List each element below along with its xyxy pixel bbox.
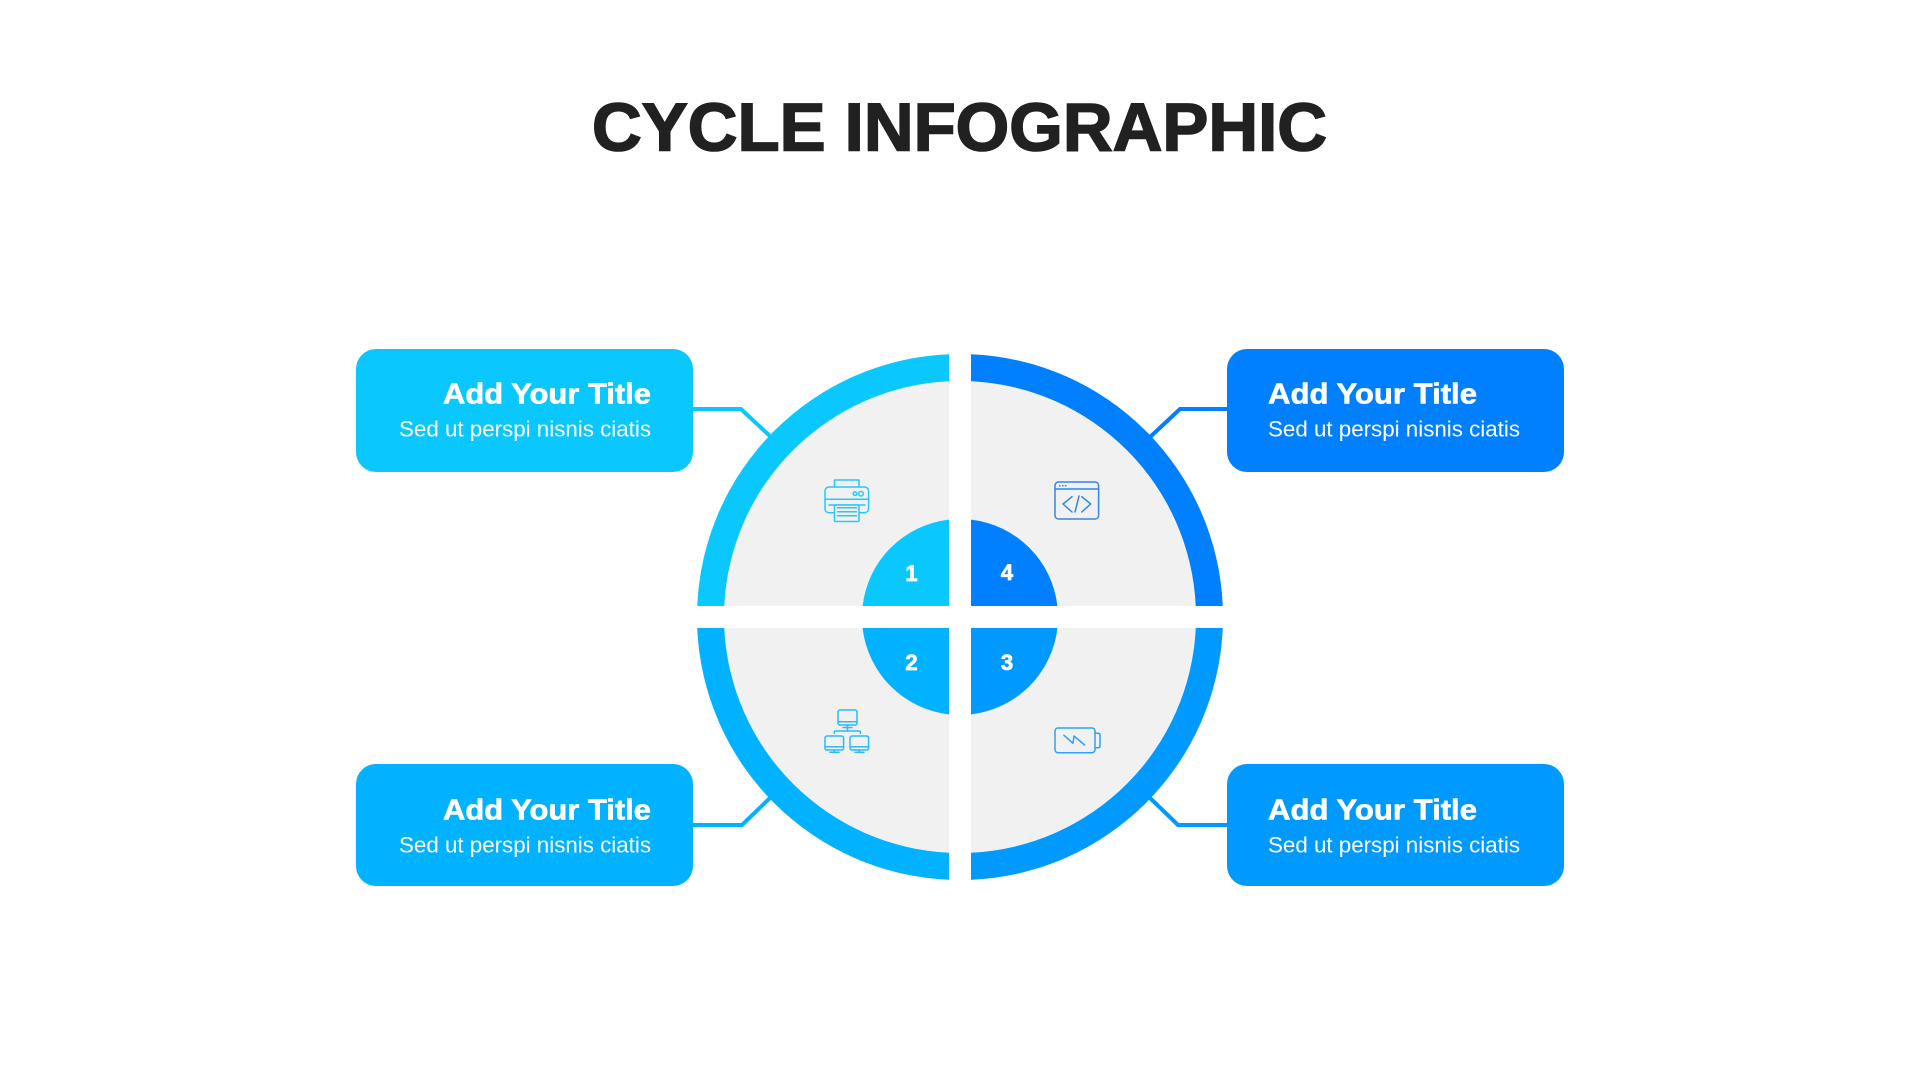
icon: code window [1055, 482, 1099, 519]
number 3: 3 [1001, 650, 1013, 675]
panel: segment 3 [971, 628, 1223, 880]
icon: battery charging [1055, 728, 1100, 753]
heading: box 3: Add Your Title [1268, 794, 1477, 826]
panel: segment 4 [971, 354, 1223, 606]
panel: callout box 4 [1227, 349, 1564, 472]
connector: box 1 to segment 1 [693, 409, 772, 438]
heading: box 2: Add Your Title [443, 794, 651, 826]
heading: box 1: Add Your Title [443, 378, 651, 410]
panel: callout box 3 [1227, 764, 1564, 886]
connector: box 2 to segment 2 [693, 797, 771, 825]
title: CYCLE INFOGRAPHIC [592, 90, 1327, 166]
icon: printer [825, 480, 869, 522]
text: box 1: Sed ut perspi nisnis ciatis [399, 416, 651, 442]
connector: box 4 to segment 4 [1149, 409, 1227, 438]
text: box 4: Sed ut perspi nisnis ciatis [1268, 416, 1520, 442]
text: box 2: Sed ut perspi nisnis ciatis [399, 832, 651, 858]
number 1: 1 [905, 561, 918, 586]
connector: box 3 to segment 3 [1149, 797, 1227, 825]
panel: callout box 1 [356, 349, 693, 472]
panel: callout box 2 [356, 764, 693, 886]
heading: box 4: Add Your Title [1268, 378, 1477, 410]
number 4: 4 [1001, 560, 1014, 585]
number 2: 2 [905, 650, 918, 675]
text: box 3: Sed ut perspi nisnis ciatis [1268, 832, 1520, 858]
panel: segment 2 [697, 628, 949, 880]
icon: network of computers [825, 710, 869, 752]
panel: segment 1 [697, 354, 949, 606]
